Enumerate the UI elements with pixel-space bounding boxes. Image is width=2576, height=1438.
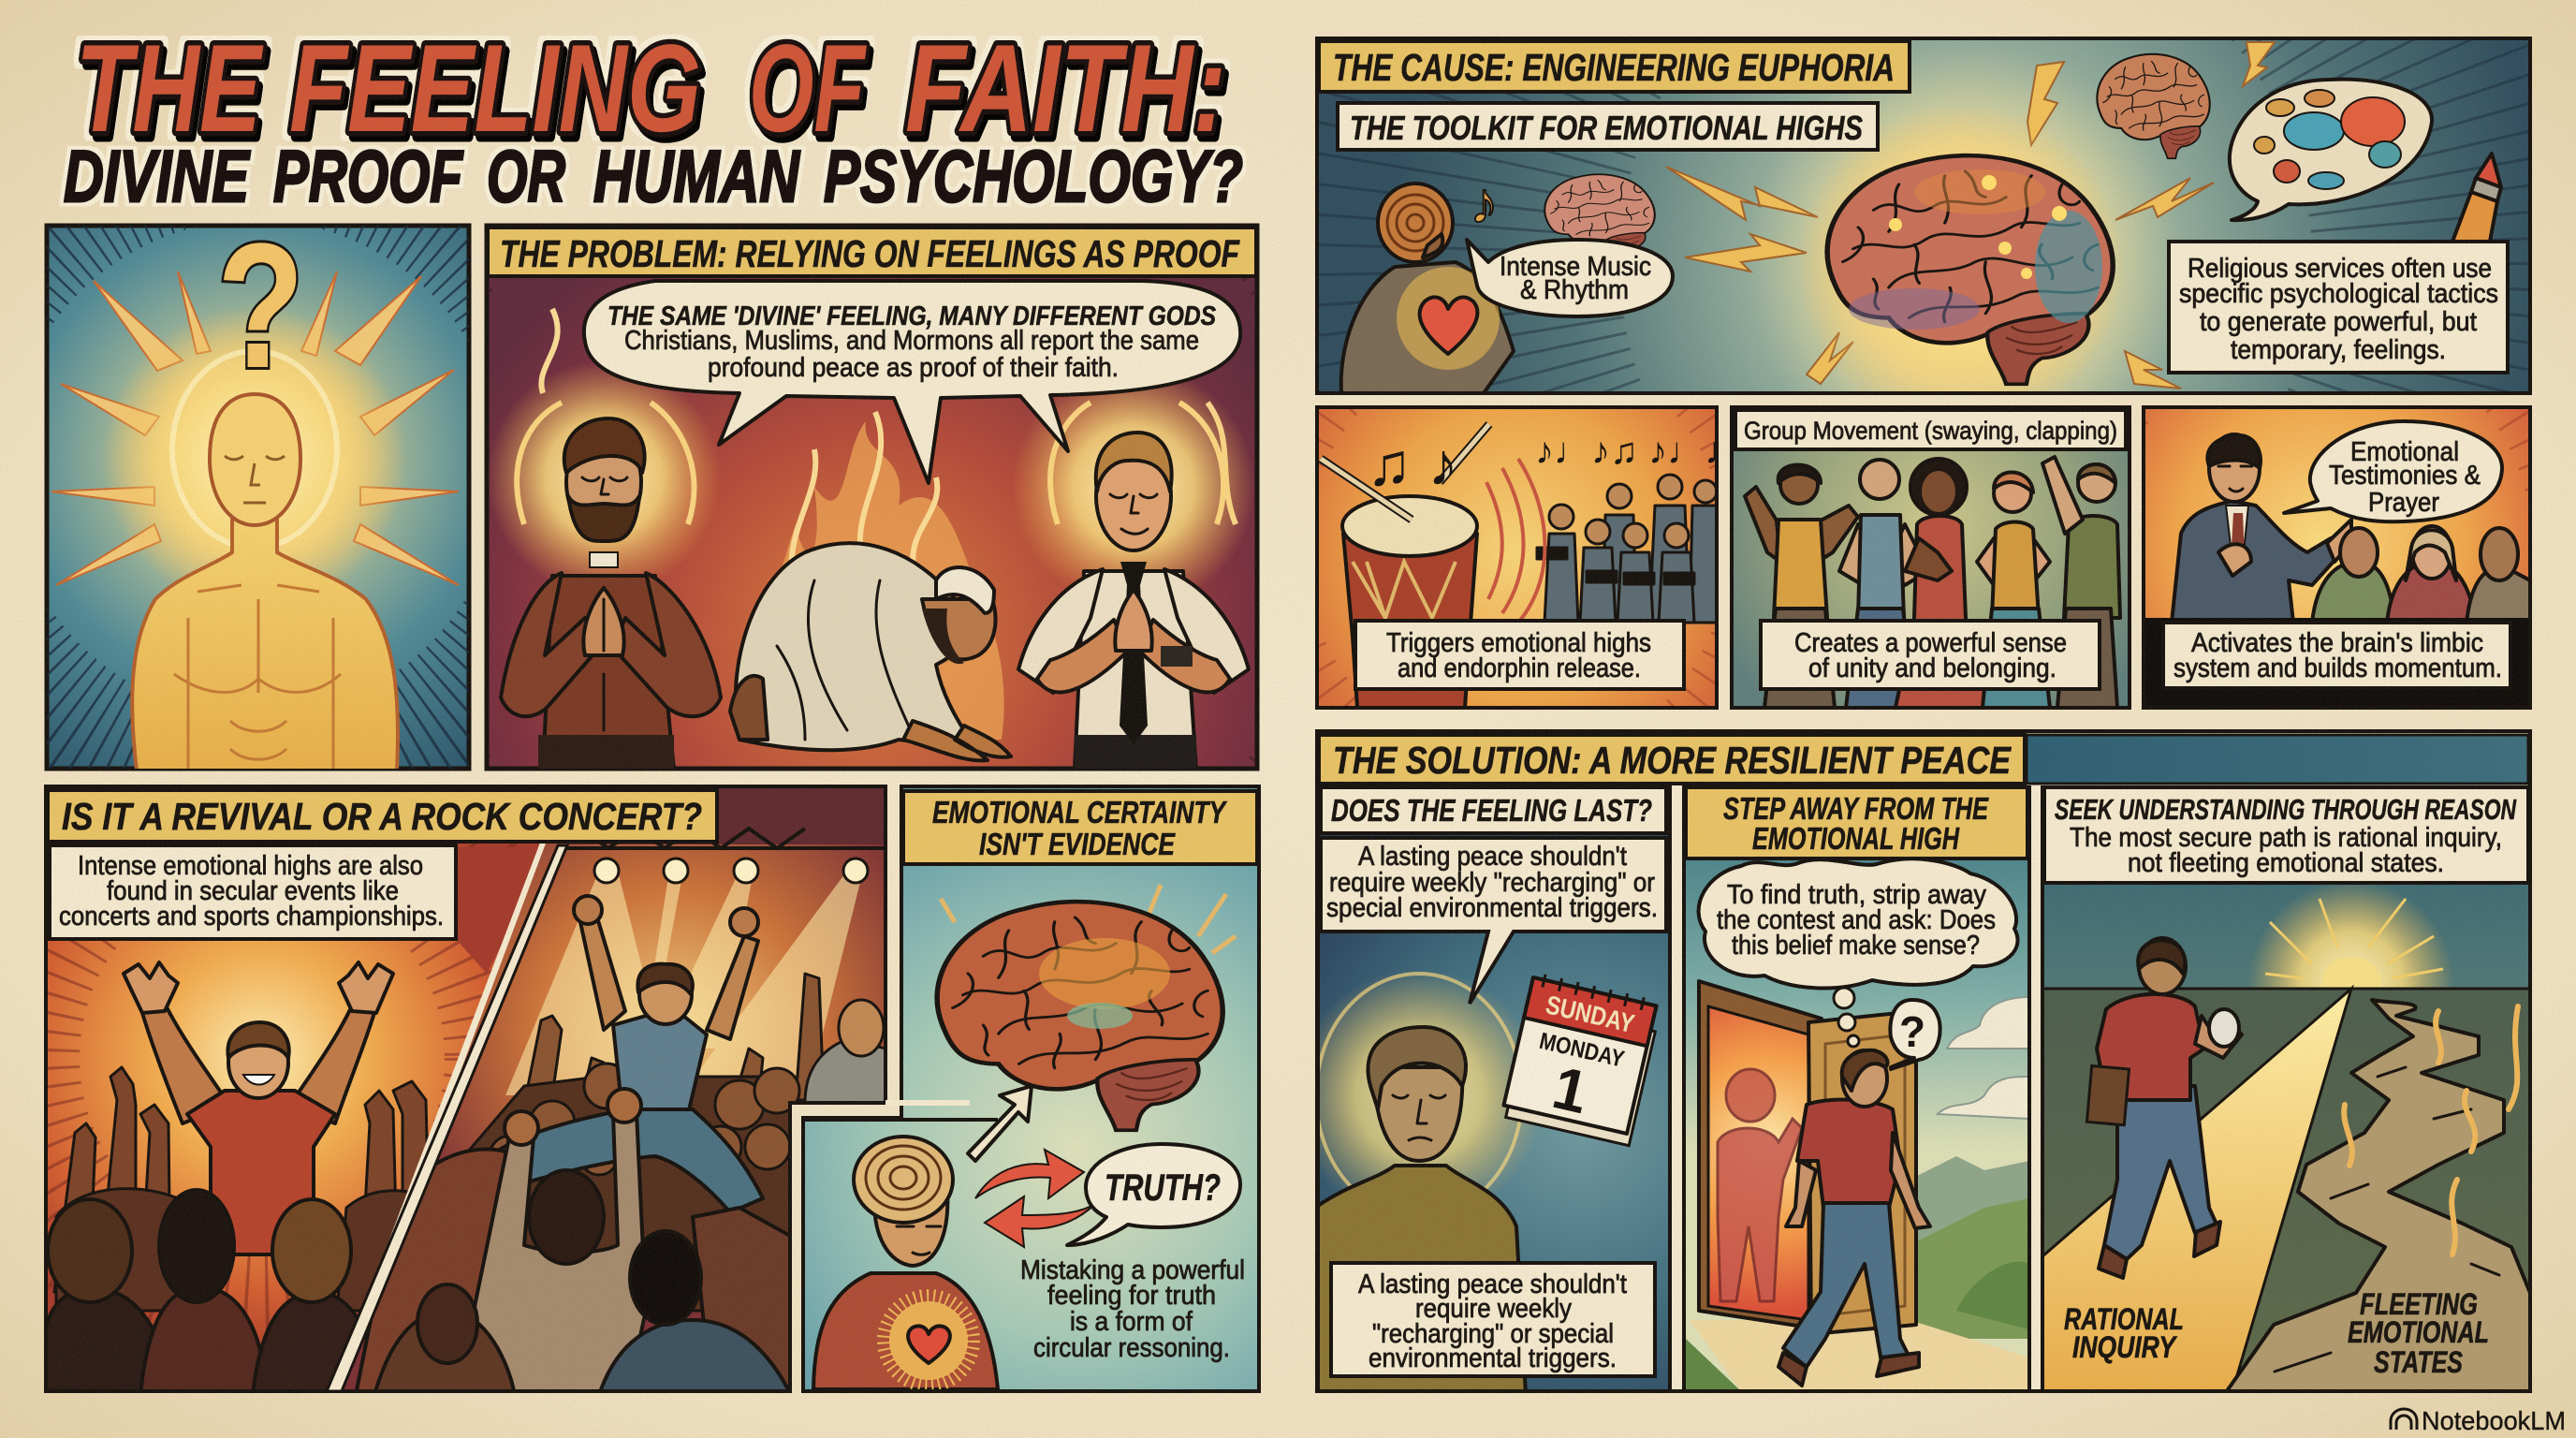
small brain left: [1544, 174, 1655, 258]
bubble: testimonies: Testimonies &: [2329, 461, 2481, 491]
title line 1: FEELING: [289, 20, 701, 158]
bottom caption: "recharging" or special: [1372, 1319, 1614, 1349]
foreground silhouettes: [2145, 618, 2528, 708]
doorway: [1699, 981, 1916, 1334]
panel: the cause: [1317, 0, 2530, 805]
man with raised arms: [124, 962, 393, 1255]
caption: limbic system: Activates the brain's limbic: [2191, 628, 2483, 658]
label: rational inquiry: [2064, 1302, 2184, 1364]
bubble: testimonies: Prayer: [2368, 488, 2439, 518]
bottom caption: environmental triggers.: [1368, 1343, 1617, 1373]
bubble body line 1: Christians, Muslims, and Mormons all report the same: [624, 326, 1199, 356]
label: fleeting emotional states: STATES: [2374, 1345, 2464, 1379]
figure in the doorway: [1718, 1069, 1802, 1301]
caption: triggers: Triggers emotional highs: [1386, 628, 1651, 658]
spotlights: [505, 871, 863, 1105]
caption: revival: [50, 845, 456, 939]
choir: [1537, 475, 1717, 623]
question mark: ?: [217, 207, 304, 405]
walking man: [1778, 1050, 1930, 1386]
sun: [2248, 880, 2454, 1086]
title line 2: PSYCHOLOGY?: [824, 135, 1243, 217]
right scene: concert: [337, 788, 889, 1395]
dancers: [1745, 457, 2120, 708]
panel: revival or rock concert: [0, 786, 889, 1395]
crowd left: [41, 1190, 384, 1395]
title line 2: DIVINE: [64, 135, 250, 217]
caption: seek understanding: not fleeting emotional states.: [2128, 848, 2444, 878]
lightning bolts: [1666, 42, 2275, 389]
figure: bowing man: [730, 543, 1011, 760]
drumsticks: [1321, 424, 1489, 520]
arrow to brain: [968, 1086, 1032, 1161]
bubble: testimonies: Emotional: [2350, 437, 2459, 467]
caption: triggers: [1355, 621, 1684, 689]
label: rational inquiry: RATIONAL: [2064, 1302, 2184, 1336]
truth bubble: [1067, 1144, 1240, 1245]
panel: the solution: [1293, 731, 2530, 1395]
figure: priest: [487, 360, 721, 770]
subheading: toolkit: THE TOOLKIT FOR EMOTIONAL HIGHS: [1350, 109, 1863, 147]
text: circular reasoning: circular ressoning.: [1033, 1333, 1230, 1363]
heading: the solution: THE SOLUTION: A MORE RESILIENT PEACE: [1333, 739, 2012, 782]
title line 2: HUMAN: [593, 135, 800, 217]
panel: the problem: [485, 223, 1260, 771]
title line 1: FAITH:: [905, 20, 1226, 158]
crowd right foreground: [356, 1089, 791, 1395]
caption: tactics: Religious services often use: [2188, 254, 2492, 284]
column: does the feeling last: [1293, 787, 1670, 1395]
caption with tail: A lasting peace shouldn't: [1358, 842, 1627, 872]
bubble heading: THE SAME 'DIVINE' FEELING, MANY DIFFERENT GODS: [607, 301, 1217, 331]
thought cloud: the contest and ask: Does: [1717, 905, 1996, 935]
pencil: [2452, 154, 2501, 242]
figure: man in white shirt: [1012, 365, 1255, 770]
left scene: revival: [0, 788, 572, 1395]
calendar: [1501, 972, 1662, 1146]
sound waves: [1486, 459, 1544, 623]
tired man: [1315, 1027, 1526, 1395]
text: circular reasoning: Mistaking a powerful: [1020, 1255, 1245, 1285]
speech bubble: [584, 281, 1240, 483]
preacher: [2172, 434, 2351, 623]
bubble: testimonies: [2284, 421, 2502, 521]
title line 2: OR: [487, 135, 565, 217]
title: [64, 20, 1243, 217]
person with spiral head: [1341, 183, 1514, 393]
caption: revival: Intense emotional highs are also: [78, 851, 423, 881]
caption: revival: found in secular events like: [107, 876, 399, 906]
caption: seek understanding: The most secure path is rational inquiry,: [2070, 823, 2502, 853]
caption: limbic system: system and builds momentum.: [2174, 653, 2502, 683]
raised hands behind: [54, 1067, 440, 1311]
caption: tactics: to generate powerful, but: [2200, 307, 2477, 337]
caption: unity: Creates a powerful sense: [1794, 628, 2067, 658]
diagonal panel divider: [327, 845, 567, 1391]
ground: [2044, 989, 2528, 1391]
thought cloud: this belief make sense?: [1732, 931, 1980, 961]
central brain: [1827, 155, 2113, 384]
title line 1: OF: [749, 20, 868, 158]
subheading: step away: STEP AWAY FROM THE: [1723, 791, 1989, 826]
heading: group movement: [1735, 410, 2126, 449]
brain upper right: [2097, 54, 2210, 158]
bottom caption: [1331, 1263, 1655, 1376]
caption: revival: concerts and sports championships.: [59, 902, 444, 932]
caption with tail: require weekly "recharging" or: [1329, 868, 1655, 898]
crowd right background: [412, 974, 824, 1311]
panel: glowing figure with question mark: [45, 223, 472, 771]
panel: testimonies: [2078, 300, 2565, 786]
subheading: does the feeling last: [1321, 787, 1666, 833]
text: circular reasoning: is a form of: [1070, 1307, 1193, 1337]
thought cloud: To find truth, strip away: [1727, 880, 1986, 910]
subheading: toolkit: [1338, 103, 1878, 150]
flames: [2344, 1006, 2518, 1255]
drum: [1342, 496, 1477, 708]
man from behind: [2086, 938, 2242, 1278]
music notes: ♫ ♪: [1367, 431, 1458, 498]
panel: music and choir: ♪♩♪♫ ♪♩♪: [1535, 431, 1723, 472]
bubble: intense music: & Rhythm: [1520, 275, 1629, 305]
large brain: [937, 902, 1222, 1130]
thought cloud: [1699, 858, 2018, 989]
column: step away: [1684, 787, 2029, 1391]
heading: emotional certainty: EMOTIONAL CERTAINTY: [932, 795, 1227, 829]
winding path: [2224, 1000, 2530, 1395]
caption: triggers: and endorphin release.: [1398, 653, 1641, 683]
caption: tactics: [2169, 242, 2508, 373]
calendar: 1: [1546, 1053, 1594, 1126]
caption: tactics: temporary, feelings.: [2231, 335, 2446, 365]
subheading: step away: EMOTIONAL HIGH: [1752, 821, 1960, 856]
heading: the problem: THE PROBLEM: RELYING ON FEELINGS AS PROOF: [500, 232, 1240, 275]
heading: group movement: Group Movement (swaying, clapping): [1744, 417, 2117, 445]
bottom caption: require weekly: [1415, 1294, 1572, 1324]
caption with tail: [1321, 838, 1666, 1004]
question bubble: ?: [1899, 1007, 1925, 1056]
heading: revival: IS IT A REVIVAL OR A ROCK CONCERT?: [62, 795, 702, 838]
heading: emotional certainty: ISN'T EVIDENCE: [979, 827, 1176, 861]
panel: emotional certainty: [803, 786, 1259, 1391]
question bubble: [1890, 1000, 1940, 1069]
text: circular reasoning: [1020, 1255, 1245, 1363]
subheading: does the feeling last: DOES THE FEELING LAST?: [1331, 793, 1652, 828]
panel: music and choir: [1273, 309, 1760, 796]
music note: ♪: [1470, 171, 1499, 236]
title line 2: PROOF: [273, 135, 464, 217]
truth bubble: TRUTH?: [1105, 1167, 1221, 1209]
label: fleeting emotional states: [2348, 1287, 2489, 1379]
figure body: [132, 394, 398, 770]
label: fleeting emotional states: FLEETING: [2360, 1287, 2478, 1321]
title line 1: THE: [76, 20, 264, 158]
notebooklm logo: NotebookLM: [2422, 1406, 2566, 1435]
bubble: intense music: Intense Music: [1500, 252, 1651, 282]
heading bar: [2027, 735, 2528, 784]
landscape: [1910, 1156, 2029, 1273]
subheading: step away: [1686, 787, 2027, 858]
caption: seek understanding: [2044, 787, 2528, 883]
calendar: MONDAY: [1537, 1028, 1627, 1073]
caption: unity: of unity and belonging.: [1808, 653, 2056, 683]
heading: the cause: THE CAUSE: ENGINEERING EUPHORIA: [1333, 46, 1895, 89]
panel: group movement: [1732, 407, 2130, 708]
bubble: intense music: [1467, 240, 1673, 316]
text: circular reasoning: feeling for truth: [1047, 1281, 1216, 1311]
audience: [2312, 526, 2530, 623]
heading: the cause: [1319, 41, 1910, 92]
calendar: SUNDAY: [1543, 990, 1637, 1038]
crowd-surfing man: [459, 896, 763, 1212]
heading: emotional certainty: [903, 791, 1257, 864]
column: seek understanding: [2042, 787, 2530, 1395]
circular arrows: [975, 1150, 1095, 1247]
boy with spiral head: [813, 1137, 998, 1389]
bubble body line 2: profound peace as proof of their faith.: [708, 353, 1119, 383]
title line 2: [64, 135, 1243, 217]
title line 1: [76, 20, 1226, 158]
label: fleeting emotional states: EMOTIONAL: [2348, 1315, 2489, 1349]
caption: limbic system: [2163, 623, 2510, 688]
clouds: [1938, 997, 2029, 1119]
flames: [749, 421, 1004, 740]
label: rational inquiry: INQUIRY: [2072, 1330, 2177, 1364]
caption with tail: special environmental triggers.: [1326, 893, 1658, 923]
caption: unity: [1761, 621, 2100, 689]
palette speech bubble: [2230, 80, 2432, 220]
thought dots: [1834, 988, 1859, 1047]
bottom caption: A lasting peace shouldn't: [1358, 1269, 1627, 1299]
caption: tactics: specific psychological tactics: [2179, 279, 2498, 309]
straight road: [2042, 989, 2351, 1391]
